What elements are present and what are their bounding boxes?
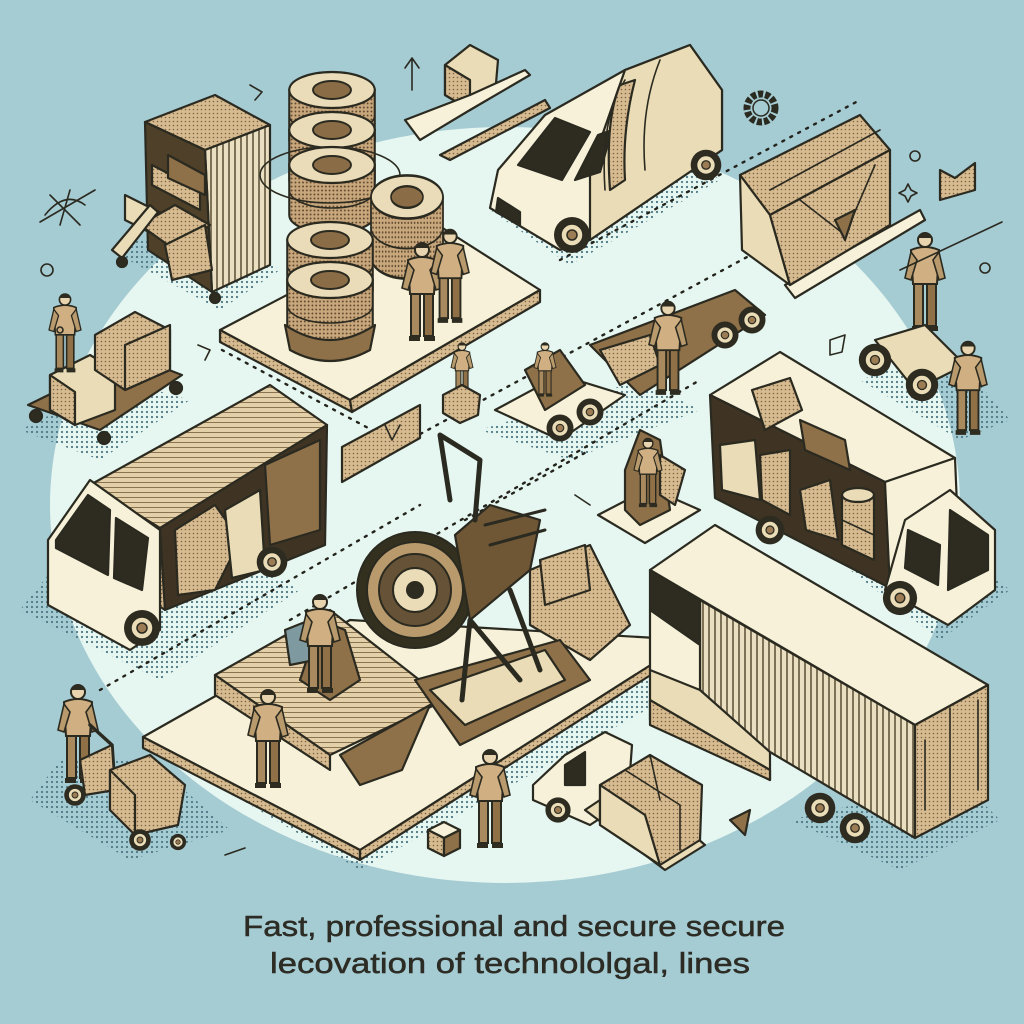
caption heading: lecovation of technololgal, lines	[270, 948, 750, 980]
truck with open box, left	[48, 385, 327, 650]
pallet jack and arrow at top	[405, 45, 550, 160]
truck with cargo, right	[710, 352, 995, 625]
caption heading	[243, 911, 785, 980]
wrapped crate on pallet	[740, 115, 925, 298]
lower main platform	[143, 620, 690, 860]
pallet truck with boxes, bottom	[533, 732, 750, 870]
trailer	[650, 525, 988, 843]
small figure on plinth	[598, 430, 700, 543]
dotted connector lines	[100, 100, 860, 800]
caption heading: Fast, professional and secure secure	[243, 911, 785, 943]
central upper platform	[220, 220, 540, 412]
small decorative icons	[40, 85, 990, 855]
worker standing at platform edge	[470, 750, 510, 848]
sign plate	[342, 405, 420, 482]
central flywheel machine	[357, 435, 630, 745]
cart with boxes, left	[28, 294, 182, 444]
stippled ground shadows	[20, 150, 1010, 870]
van	[490, 45, 722, 253]
gear icon	[747, 94, 775, 122]
worker with crate	[443, 343, 480, 423]
hand truck and worker, lower left	[58, 685, 186, 851]
worker with dolly, top right	[859, 325, 987, 435]
flatbed pallets with worker	[215, 595, 445, 788]
forklift and worker, centre right	[495, 290, 766, 442]
shelving unit	[112, 95, 270, 303]
stacked metal coils	[260, 72, 443, 361]
small crate	[428, 822, 460, 856]
worker with long pole	[900, 222, 1002, 331]
light circle backdrop	[50, 127, 960, 883]
workers by coils	[402, 230, 469, 341]
